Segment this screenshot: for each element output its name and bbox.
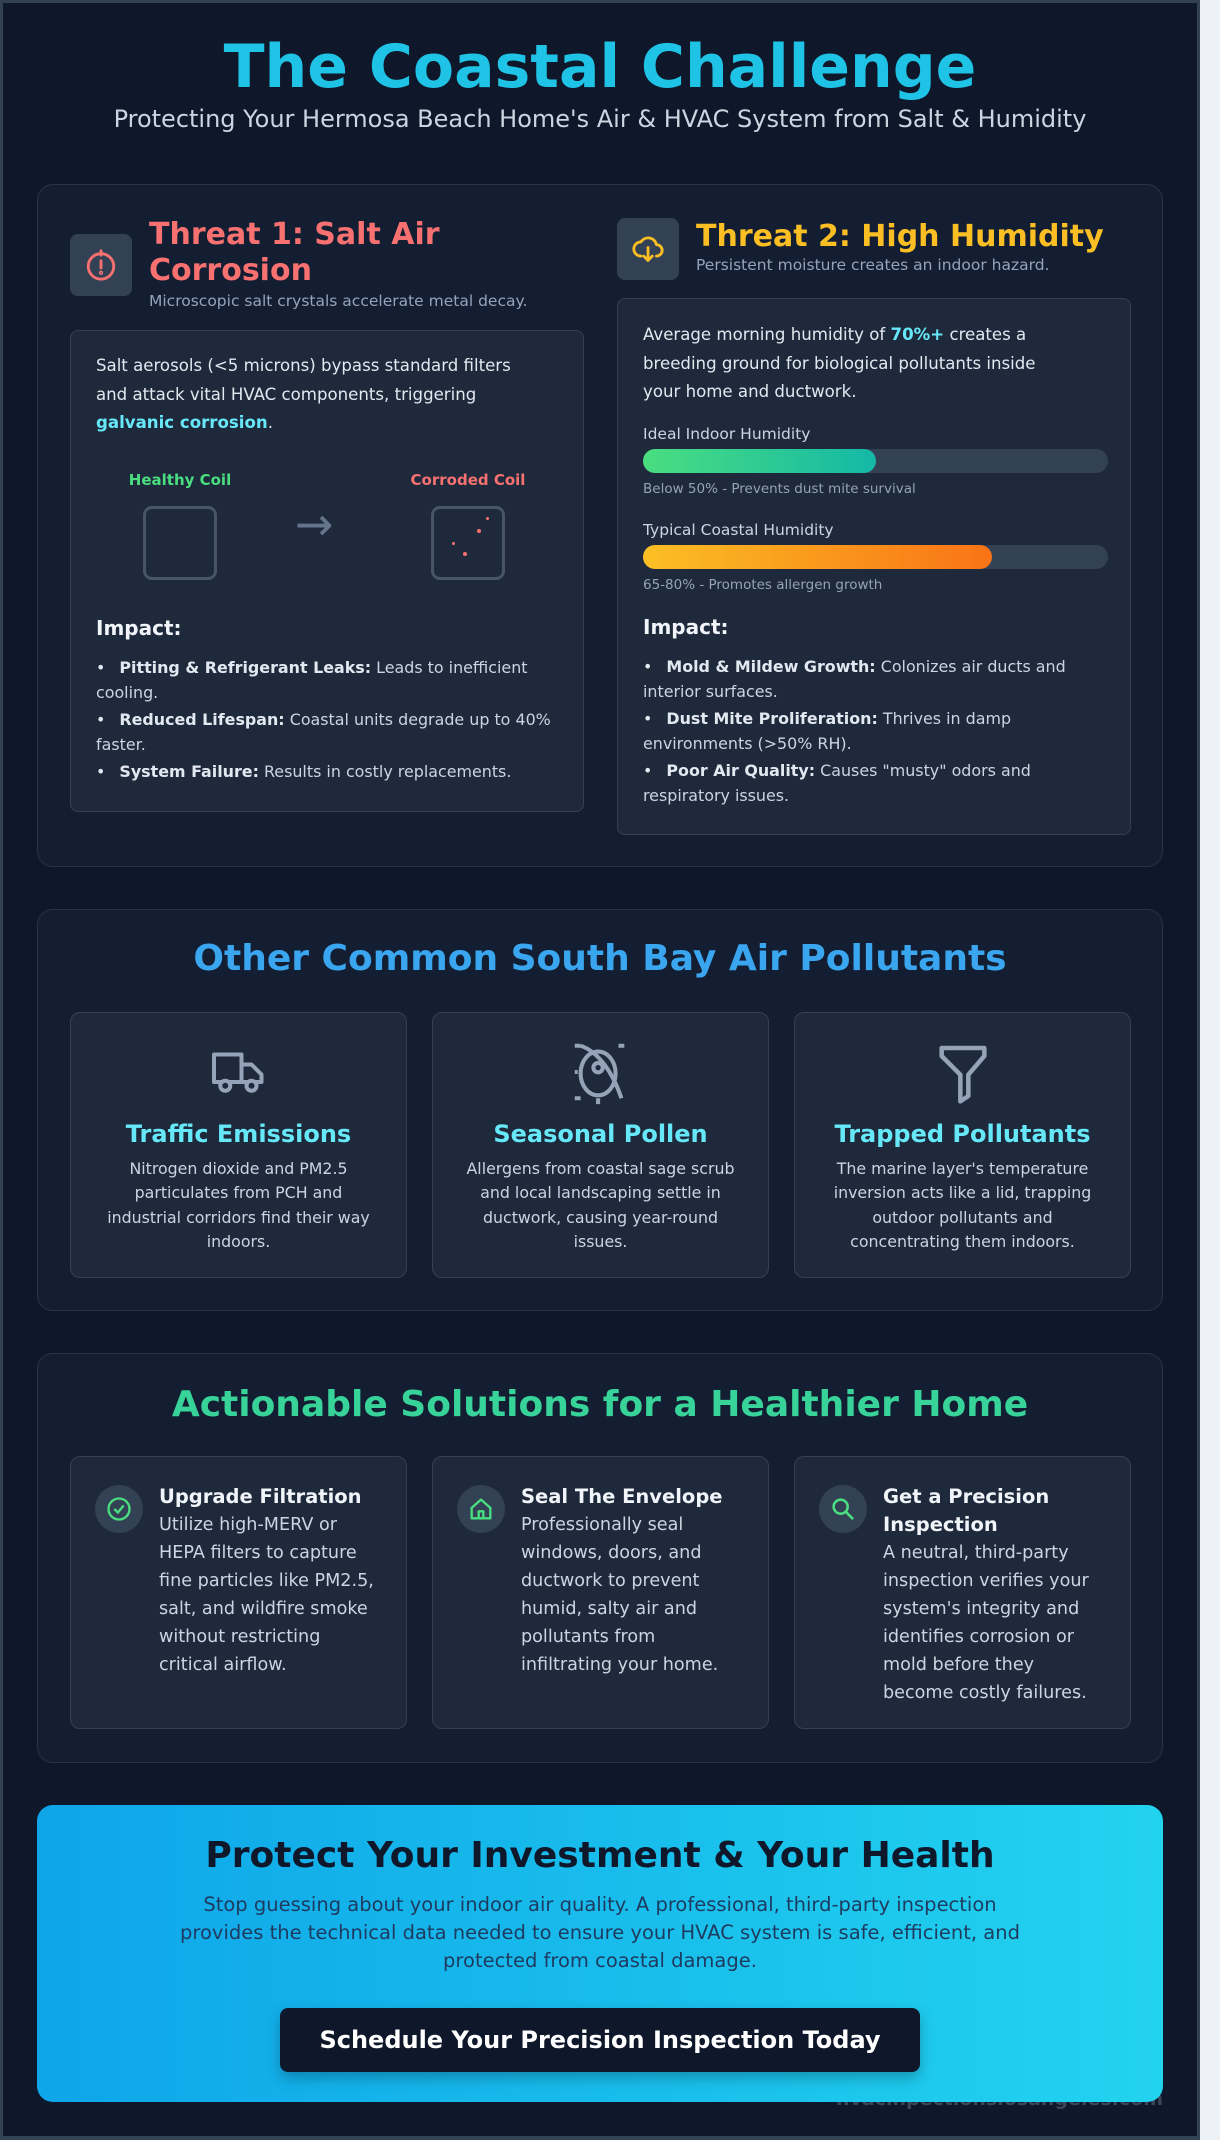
impact list 1: Impact:	[96, 616, 182, 640]
text: humidity: Average morning humidity of 70%+ creates a breeding ground for biological pollutants inside your home and ductwork.	[643, 325, 1036, 401]
card: pollen	[432, 1012, 769, 1278]
box: humidity details	[617, 298, 1131, 835]
impact list 2: Dust Mite Proliferation: Thrives in damp environments (>50% RH).	[643, 709, 1011, 752]
card: envelope	[432, 1456, 769, 1729]
impact list 2: Impact:	[643, 615, 729, 639]
card: traffic: Nitrogen dioxide and PM2.5 particulates from PCH and industrial corridors find their way indoors.	[107, 1159, 370, 1251]
card: inspection: Get a Precision Inspection	[883, 1485, 1049, 1536]
card: filtration: Upgrade Filtration	[159, 1485, 362, 1508]
icon: funnel	[939, 1046, 987, 1104]
card: traffic: Traffic Emissions	[126, 1120, 351, 1148]
heading: threat 1: Corrosion	[149, 253, 312, 288]
heading: threat 1: Threat 1: Salt Air	[149, 217, 440, 252]
card: trapped: Trapped Pollutants	[834, 1120, 1091, 1148]
chart: ideal humidity bar	[643, 425, 1108, 497]
chart: coastal humidity bar: 65-80% - Promotes allergen growth	[643, 577, 882, 593]
icon: search	[819, 1485, 867, 1533]
panel: threats	[37, 184, 1163, 867]
box: salt corrosion details	[70, 330, 584, 812]
icon: alert	[70, 234, 132, 296]
card: trapped: The marine layer's temperature inversion acts like a lid, trapping outdoor pollutants and concentrating them indoors.	[834, 1159, 1091, 1251]
panel: solutions	[37, 1353, 1163, 1763]
card: filtration	[70, 1456, 407, 1729]
icon: truck	[212, 1052, 264, 1093]
heading: threat 2: Persistent moisture creates an indoor hazard.	[696, 256, 1049, 274]
CTA button	[280, 2008, 920, 2072]
icon: home	[457, 1485, 505, 1533]
diagram: coils	[129, 471, 525, 580]
chart: coastal humidity bar: Typical Coastal Humidity	[643, 521, 834, 539]
icon: cloud	[617, 218, 679, 280]
chart: ideal humidity bar: Ideal Indoor Humidity	[643, 425, 810, 443]
chart: ideal humidity bar: Below 50% - Prevents dust mite survival	[643, 481, 916, 497]
subtitle: Protecting Your Hermosa Beach Home's Air & HVAC System from Salt & Humidity	[114, 105, 1086, 133]
card: pollen: Allergens from coastal sage scrub and local landscaping settle in ductwork, causing year-round issues.	[466, 1159, 734, 1251]
impact list 2: Mold & Mildew Growth: Colonizes air ducts and interior surfaces.	[643, 657, 1066, 700]
impact list 1: System Failure: Results in costly replacements.	[119, 762, 511, 781]
text: salt aerosols: Salt aerosols (<5 microns) bypass standard filters and attack vital HVAC components, triggering galvanic corrosion.	[96, 356, 511, 432]
arrow: →	[295, 497, 334, 551]
heading: Actionable Solutions for a Healthier Home	[172, 1384, 1028, 1425]
impact list 1: Pitting & Refrigerant Leaks: Leads to inefficient cooling.	[96, 658, 528, 702]
heading: Other Common South Bay Air Pollutants	[193, 938, 1007, 979]
icon: pollen	[574, 1044, 624, 1104]
card: inspection	[794, 1456, 1131, 1729]
impact list 2: Poor Air Quality: Causes "musty" odors and respiratory issues.	[643, 761, 1031, 804]
CTA text: Stop guessing about your indoor air quality. A professional, third-party inspection provides the technical data needed to ensure your HVAC system is safe, efficient, and protected from coastal damage.	[180, 1893, 1020, 1972]
card: pollen: Seasonal Pollen	[493, 1120, 708, 1148]
title: The Coastal Challenge	[224, 32, 976, 102]
impact list 2	[643, 615, 1066, 804]
heading: threat 1	[149, 217, 527, 310]
callout: CTA	[37, 1805, 1163, 2102]
card: filtration: Utilize high-MERV or HEPA filters to capture fine particles like PM2.5, salt, and wildfire smoke without restricting critical airflow.	[159, 1515, 374, 1675]
card: envelope: Professionally seal windows, doors, and ductwork to prevent humid, salty air and pollutants from infiltrating your home.	[521, 1515, 718, 1675]
heading: threat 2	[696, 219, 1104, 274]
card: trapped	[794, 1012, 1131, 1278]
impact list 1	[96, 616, 551, 781]
chart: coastal humidity bar	[642, 521, 1108, 593]
panel: other pollutants	[37, 909, 1163, 1311]
heading: threat 2: Threat 2: High Humidity	[696, 219, 1104, 254]
watermark: hvacinpectionslosangeles.com	[836, 2088, 1163, 2110]
diagram: coils: Healthy Coil	[129, 471, 231, 489]
CTA button: Schedule Your Precision Inspection Today	[319, 2026, 881, 2054]
impact list 1: Reduced Lifespan: Coastal units degrade up to 40% faster.	[96, 710, 551, 754]
card: traffic	[70, 1012, 407, 1278]
diagram: coils: Corroded Coil	[411, 471, 525, 489]
card: envelope: Seal The Envelope	[521, 1485, 723, 1508]
CTA heading: Protect Your Investment & Your Health	[205, 1835, 995, 1876]
heading: threat 1: Microscopic salt crystals accelerate metal decay.	[149, 292, 527, 310]
card: inspection: A neutral, third-party inspection verifies your system's integrity and identifies corrosion or mold before they become costly failures.	[883, 1543, 1089, 1703]
icon: check	[95, 1485, 143, 1533]
